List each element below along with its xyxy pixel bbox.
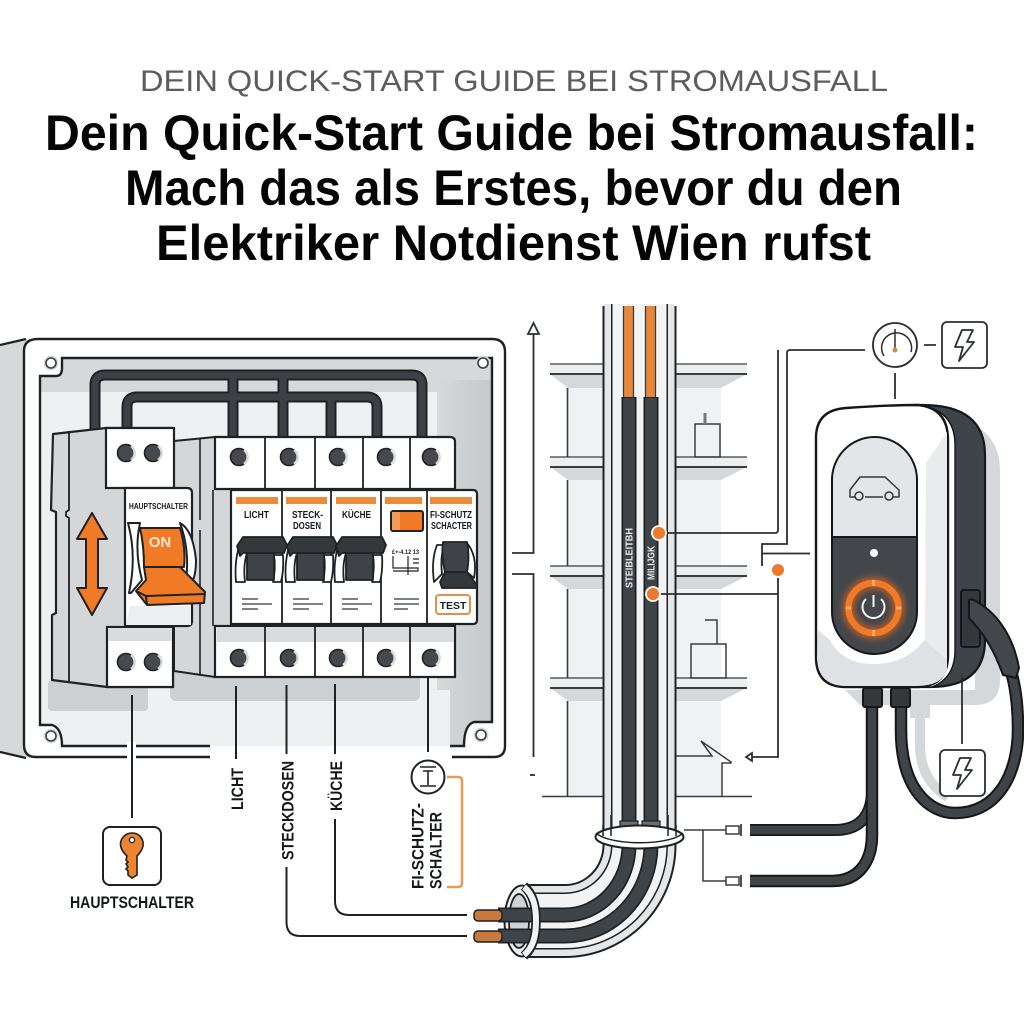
cable: charging loop — [901, 675, 1018, 813]
black cable 1 — [498, 397, 629, 915]
leader: Licht: LICHT — [228, 767, 247, 810]
label: ON: ON — [149, 534, 171, 551]
FI switch — [433, 542, 477, 588]
leader: Licht — [228, 686, 247, 810]
label: Hauptschalter callout — [70, 695, 194, 912]
test button — [436, 595, 470, 614]
label text — [408, 803, 446, 889]
module labels: DOSEN — [293, 521, 321, 532]
test button: TEST — [440, 600, 467, 612]
cable print: MILIJGK — [646, 545, 658, 580]
conduit open end ring — [504, 886, 540, 956]
status dot — [870, 549, 878, 557]
breaker modules — [231, 490, 477, 624]
icon: car — [850, 477, 899, 500]
fixture boxes — [676, 413, 731, 796]
module labels — [244, 508, 473, 532]
eyebrow heading: DEIN QUICK-START GUIDE BEI STROMAUSFALL — [140, 65, 888, 98]
bus wires — [95, 375, 422, 440]
panel: building section — [542, 364, 752, 796]
screen halo — [832, 437, 917, 654]
breaker toggle: Licht — [236, 537, 287, 582]
terminal blocks — [106, 428, 174, 488]
bottom terminals — [215, 626, 455, 677]
breaker toggle: Küche — [334, 537, 386, 582]
box front frame — [24, 339, 505, 757]
module labels: FI-SCHUTZ — [430, 510, 472, 521]
orange strips — [236, 497, 472, 504]
leader: FI-Schutzschalter — [408, 678, 462, 889]
orange conductors — [624, 306, 656, 398]
leader: Steckdosen: STECKDOSEN — [278, 761, 298, 860]
wall — [568, 388, 721, 796]
breaker toggle: Steckdosen — [286, 537, 337, 582]
indicator window — [391, 511, 423, 531]
cable terminals — [684, 824, 741, 887]
cable glands — [863, 688, 910, 707]
switch label plate — [125, 488, 192, 626]
breaker rail body — [174, 437, 232, 677]
arrow: up and down — [77, 513, 107, 615]
title: Elektriker Notdienst Wien rufst — [156, 215, 871, 271]
copper conductors — [474, 910, 502, 942]
module circuit symbol: £+-4.12 13 — [392, 550, 420, 556]
marker — [646, 587, 660, 601]
screen panel lower — [832, 537, 917, 654]
leader: Küche: KÜCHE — [327, 761, 346, 811]
cable boots — [620, 821, 660, 837]
top terminals — [215, 437, 455, 489]
ring front rim — [524, 886, 536, 956]
front shell — [816, 405, 948, 687]
module labels: SCHACTER — [431, 521, 473, 532]
bracket — [447, 777, 462, 887]
socket — [961, 590, 980, 647]
black cable 2 — [498, 397, 651, 936]
label: Hauptschalter on breaker: HAUPTSCHALTER — [129, 502, 188, 511]
module labels: KÜCHE — [342, 508, 371, 521]
shell shading — [925, 432, 947, 660]
leader: Steckdosen — [278, 685, 467, 936]
box side wall — [0, 339, 30, 758]
icon: test symbol — [412, 760, 444, 794]
dark side housing — [915, 405, 985, 687]
icon: bolt box lower — [940, 675, 985, 796]
box inner panel — [40, 358, 492, 746]
white edge strip — [915, 405, 955, 687]
toggle switch: ON — [128, 523, 205, 605]
gap in frame for leader — [127, 742, 136, 762]
title: Dein Quick-Start Guide bei Stromausfall: — [45, 105, 978, 161]
leader: Küche — [327, 684, 467, 915]
module circuit symbol — [392, 550, 420, 575]
label text: SCHALTER — [426, 812, 446, 889]
module labels: STECK- — [292, 510, 323, 521]
leader lines and orange markers — [646, 350, 865, 761]
icon: bolt box top — [942, 322, 987, 368]
icon: key — [103, 827, 161, 885]
terminal screws — [118, 444, 162, 670]
label text: FI-SCHUTZ- — [408, 803, 428, 889]
conduit collar — [596, 815, 684, 848]
conduit tube — [525, 304, 640, 921]
shadow cable — [920, 712, 948, 797]
marker — [652, 526, 666, 540]
title: Mach das als Erstes, bevor du den — [125, 160, 902, 216]
cable print: STEIBLEITBH — [624, 528, 636, 588]
cable: supply — [750, 705, 872, 881]
box screws — [44, 356, 490, 744]
panel: wallbox charger — [750, 405, 1019, 881]
marker — [772, 564, 784, 576]
power button — [846, 580, 901, 636]
charging plug — [969, 599, 1019, 678]
panel: distribution box — [0, 339, 505, 762]
label text: HAUPTSCHALTER — [70, 893, 194, 912]
arrow: left riser lines — [512, 323, 539, 775]
spec lines — [242, 599, 419, 609]
conduit with cables — [474, 304, 684, 956]
title — [45, 105, 978, 271]
icon: gauge — [873, 323, 936, 399]
shelves — [542, 364, 752, 796]
module labels: LICHT — [244, 510, 269, 521]
main breaker — [51, 428, 205, 687]
wall shadow — [845, 425, 1000, 718]
screen panel upper — [832, 437, 917, 537]
